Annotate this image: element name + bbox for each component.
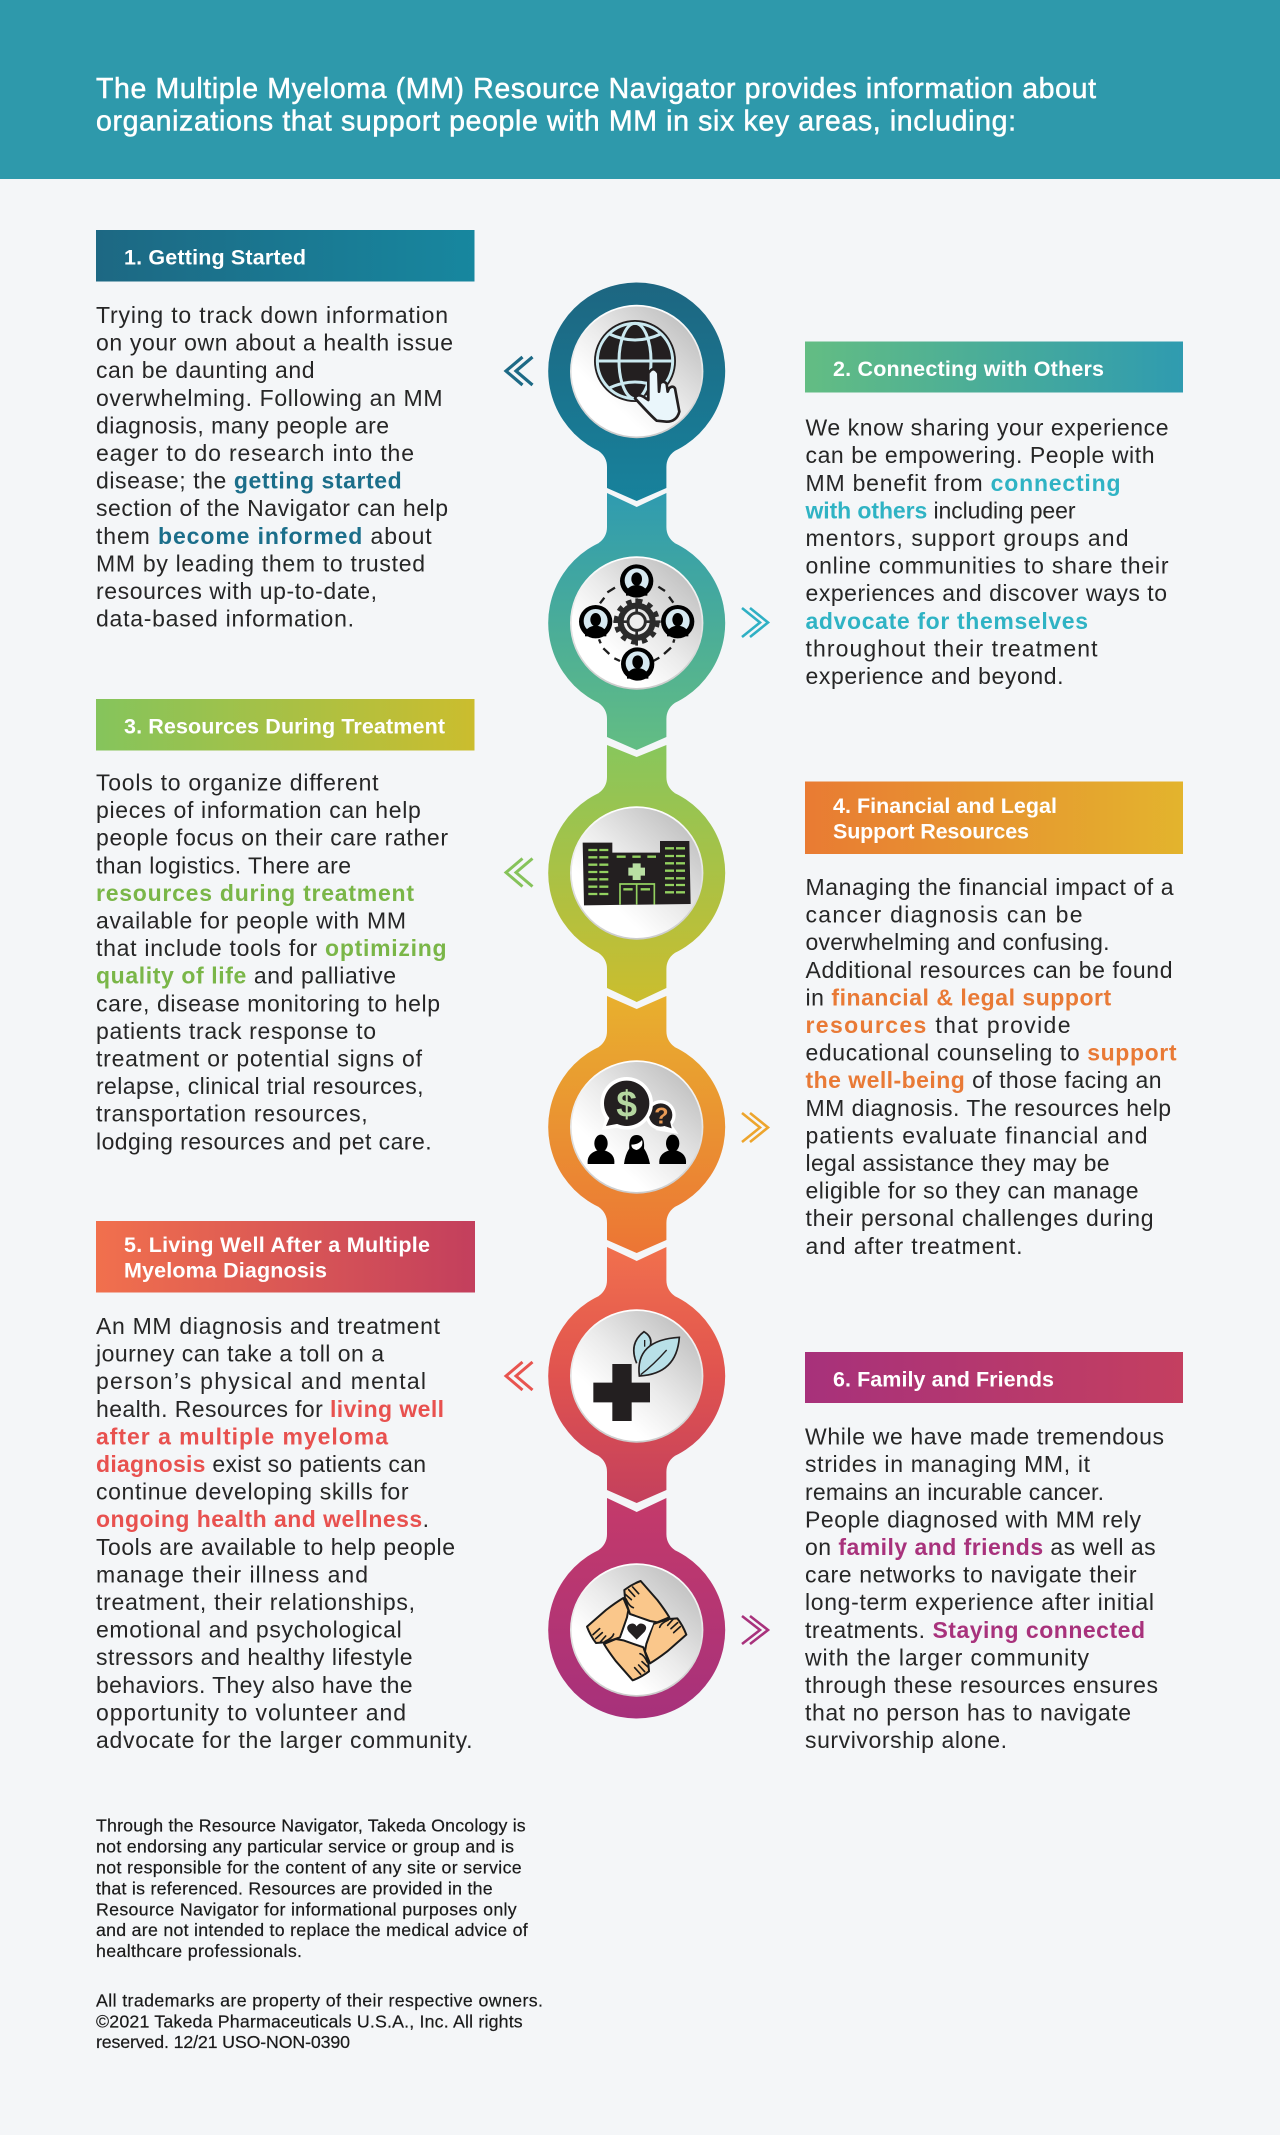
footnote: disclaimer: not endorsing any particular service or group and is	[96, 1837, 514, 1857]
icon: speech bubbles and three people: ?	[654, 1102, 668, 1128]
heading: Living Well: Myeloma Diagnosis	[124, 1258, 327, 1282]
text block: Living Well	[95, 1313, 472, 1753]
chain segment 4: financial	[548, 996, 725, 1253]
text block: Family and Friends: through these resources ensures	[805, 1672, 1158, 1698]
text block: Living Well: stressors and healthy lifestyle	[96, 1644, 413, 1670]
footnote: disclaimer: not responsible for the content of any site or service	[96, 1858, 522, 1878]
arrow: left, red	[506, 1362, 532, 1390]
text block: Getting Started	[96, 302, 453, 632]
footnote: disclaimer: healthcare professionals.	[96, 1941, 302, 1961]
text block: Getting Started: can be daunting and	[96, 357, 314, 383]
text block: Family and Friends: While we have made tremendous	[805, 1424, 1164, 1450]
chain segment 3: hospital	[548, 745, 725, 1002]
text block: Financial and Legal	[806, 874, 1177, 1259]
text block: Connecting with Others: We know sharing your experience	[806, 415, 1168, 441]
text block: Family and Friends: long-term experience after initial	[805, 1589, 1154, 1615]
text block: Getting Started: section of the Navigator can help	[96, 495, 448, 521]
heading: Connecting with Others	[805, 342, 1183, 392]
panel: 5. Living Well After a Multiple Myeloma Diagnosis	[95, 1221, 475, 1753]
text block: Connecting with Others: throughout their treatment	[806, 635, 1098, 661]
chain segment 6: family	[548, 1498, 725, 1718]
text block: Financial and Legal: educational counseling to support	[806, 1040, 1177, 1066]
text block: Living Well: after a multiple myeloma	[96, 1423, 388, 1449]
text block: Resources During Treatment	[96, 770, 448, 1154]
heading: Resources During Treatment: 3. Resources During Treatment	[124, 714, 445, 738]
text block: Getting Started: Trying to track down information	[96, 302, 448, 328]
heading: Getting Started	[96, 230, 474, 282]
text block: Living Well: health. Resources for living well	[96, 1396, 444, 1422]
text block: Getting Started: resources with up-to-date,	[96, 578, 377, 604]
footnote: disclaimer: that is referenced. Resources are provided in the	[96, 1878, 493, 1898]
panel: 1. Getting Started	[96, 230, 474, 632]
text block: Living Well: continue developing skills for	[96, 1479, 409, 1505]
footnote: disclaimer: and are not intended to replace the medical advice of	[96, 1920, 528, 1940]
heading: Financial and Legal Support Resources: Support Resources	[833, 820, 1029, 844]
arrow: right, orange	[742, 1113, 768, 1142]
text block: Connecting with Others	[804, 415, 1169, 689]
text block: Resources During Treatment: care, disease monitoring to help	[96, 990, 440, 1016]
text block: Getting Started: on your own about a health issue	[96, 330, 453, 356]
text block: Living Well: behaviors. They also have the	[96, 1672, 413, 1698]
text block: Financial and Legal: legal assistance they may be	[806, 1150, 1110, 1176]
heading: Family and Friends: 6. Family and Friends	[833, 1368, 1054, 1392]
text block: Family and Friends: People diagnosed with MM rely	[805, 1506, 1142, 1532]
text block: Living Well: Tools are available to help people	[96, 1534, 455, 1560]
footnote: trademarks and copyright	[96, 1991, 543, 2052]
text block: Family and Friends: survivorship alone.	[805, 1727, 1007, 1753]
text block: Living Well: manage their illness and	[96, 1561, 368, 1587]
arrow: left, green	[506, 858, 532, 886]
chain segment 2: network	[548, 493, 725, 750]
text block: Getting Started: eager to do research into the	[96, 440, 414, 466]
title	[96, 73, 1096, 138]
icon: hospital building	[583, 841, 691, 905]
text block: Financial and Legal: cancer diagnosis can be	[806, 902, 1082, 928]
text block: Connecting with Others: can be empowering. People with	[806, 442, 1154, 468]
icon: globe with pointing hand	[594, 320, 679, 422]
text block: Family and Friends: care networks to navigate their	[805, 1562, 1137, 1588]
text block: Resources During Treatment: Tools to organize different	[96, 770, 379, 796]
text block: Connecting with Others: advocate for themselves	[806, 608, 1088, 634]
text block: Family and Friends: with the larger community	[804, 1644, 1090, 1670]
footnote: trademarks and copyright: reserved. 12/21 USO-NON-0390	[96, 2032, 350, 2052]
text block: Financial and Legal: overwhelming and confusing.	[806, 929, 1110, 955]
text block: Connecting with Others: MM benefit from connecting	[806, 470, 1120, 496]
text block: Living Well: person’s physical and mental	[96, 1368, 426, 1394]
text block: Resources During Treatment: lodging resources and pet care.	[96, 1128, 432, 1154]
text block: Resources During Treatment: than logistics. There are	[96, 852, 351, 878]
icon: people around a gear	[579, 564, 694, 681]
footnote: disclaimer: Through the Resource Navigator, Takeda Oncology is	[96, 1816, 526, 1836]
chain segment 1: globe	[548, 282, 725, 501]
text block: Connecting with Others: with others including peer	[804, 497, 1076, 523]
text block: Family and Friends	[804, 1424, 1164, 1753]
footnote: disclaimer	[96, 1816, 528, 1961]
text block: Living Well: journey can take a toll on a	[95, 1341, 384, 1367]
text block: Resources During Treatment: quality of life and palliative	[96, 963, 396, 989]
text block: Connecting with Others: experiences and discover ways to	[806, 580, 1167, 606]
text block: Resources During Treatment: resources during treatment	[96, 880, 414, 906]
text block: Connecting with Others: experience and beyond.	[806, 663, 1064, 689]
text block: Getting Started: diagnosis, many people are	[96, 412, 389, 438]
text block: Financial and Legal: their personal challenges during	[806, 1205, 1154, 1231]
arrow: right, magenta	[742, 1616, 768, 1644]
text block: Resources During Treatment: relapse, clinical trial resources,	[96, 1073, 424, 1099]
text block: Resources During Treatment: pieces of information can help	[96, 797, 421, 823]
text block: Living Well: diagnosis exist so patients can	[96, 1451, 426, 1477]
text block: Getting Started: disease; the getting started	[96, 468, 402, 494]
icon: speech bubbles and three people: $	[616, 1083, 637, 1125]
text block: Getting Started: overwhelming. Following an MM	[96, 385, 442, 411]
heading: Family and Friends	[805, 1352, 1183, 1403]
text block: Financial and Legal: eligible for so they can manage	[806, 1178, 1138, 1204]
footnote: trademarks and copyright: ©2021 Takeda Pharmaceuticals U.S.A., Inc. All rights	[96, 2011, 523, 2031]
panel: 3. Resources During Treatment	[96, 699, 474, 1154]
text block: Living Well: advocate for the larger community.	[96, 1727, 472, 1753]
heading: Financial and Legal Support Resources	[805, 782, 1183, 854]
icon: four joined hands with heart	[587, 1581, 686, 1680]
text block: Financial and Legal: in financial & legal support	[806, 984, 1112, 1010]
text block: Living Well: An MM diagnosis and treatment	[96, 1313, 441, 1339]
arrow: right, cyan	[742, 608, 768, 637]
text block: Connecting with Others: mentors, support groups and	[806, 525, 1128, 551]
heading: Living Well: 5. Living Well After a Multiple	[124, 1233, 430, 1257]
text block: Financial and Legal: MM diagnosis. The resources help	[806, 1095, 1171, 1121]
panel: 2. Connecting with Others	[804, 342, 1183, 689]
heading: Financial and Legal Support Resources: 4. Financial and Legal	[833, 794, 1057, 818]
panel: 6. Family and Friends	[804, 1352, 1183, 1753]
text block: Resources During Treatment: transportation resources,	[96, 1101, 368, 1127]
text block: Resources During Treatment: available for people with MM	[96, 908, 406, 934]
title: The Multiple Myeloma (MM) Resource Navigator provides information about	[96, 73, 1096, 105]
text block: Financial and Legal: Managing the financial impact of a	[806, 874, 1174, 900]
text block: Family and Friends: that no person has to navigate	[805, 1700, 1131, 1726]
text block: Getting Started: data-based information.	[96, 606, 354, 632]
text block: Resources During Treatment: people focus on their care rather	[96, 825, 448, 851]
text block: Living Well: ongoing health and wellness.	[96, 1506, 429, 1532]
text block: Getting Started: MM by leading them to trusted	[96, 550, 425, 576]
icon: medical cross with leaves	[593, 1332, 679, 1421]
text block: Financial and Legal: the well-being of those facing an	[806, 1067, 1162, 1093]
heading: Living Well	[96, 1221, 475, 1292]
text block: Connecting with Others: online communities to share their	[806, 553, 1169, 579]
text block: Resources During Treatment: patients track response to	[96, 1018, 376, 1044]
footnote: disclaimer: Resource Navigator for informational purposes only	[96, 1899, 517, 1919]
text block: Resources During Treatment: that include tools for optimizing	[96, 935, 447, 961]
text block: Family and Friends: treatments. Staying connected	[805, 1617, 1145, 1643]
text block: Getting Started: them become informed about	[96, 523, 432, 549]
text block: Living Well: treatment, their relationships,	[96, 1589, 415, 1615]
text block: Financial and Legal: Additional resources can be found	[806, 957, 1172, 983]
chain segment 5: wellness	[548, 1247, 725, 1503]
text block: Family and Friends: on family and friends as well as	[805, 1534, 1156, 1560]
text block: Financial and Legal: and after treatment.	[806, 1233, 1022, 1259]
arrow: left, teal	[506, 357, 532, 385]
text block: Family and Friends: remains an incurable cancer.	[805, 1479, 1104, 1505]
icon: speech bubbles and three people	[588, 1077, 686, 1164]
heading: Getting Started: 1. Getting Started	[124, 246, 306, 270]
heading: Resources During Treatment	[96, 699, 474, 750]
text block: Financial and Legal: patients evaluate financial and	[806, 1122, 1148, 1148]
text block: Resources During Treatment: treatment or potential signs of	[96, 1046, 423, 1072]
heading: Connecting with Others: 2. Connecting with Others	[833, 357, 1104, 381]
footnote: trademarks and copyright: All trademarks are property of their respective owners.	[96, 1991, 543, 2011]
text block: Financial and Legal: resources that provide	[806, 1012, 1070, 1038]
title: organizations that support people with MM in six key areas, including:	[96, 106, 1016, 138]
text block: Living Well: emotional and psychological	[96, 1617, 402, 1643]
panel: 4. Financial and Legal Support Resources	[805, 782, 1183, 1259]
header banner	[0, 0, 1280, 179]
text block: Living Well: opportunity to volunteer and	[96, 1699, 406, 1725]
text block: Family and Friends: strides in managing MM, it	[805, 1451, 1091, 1477]
